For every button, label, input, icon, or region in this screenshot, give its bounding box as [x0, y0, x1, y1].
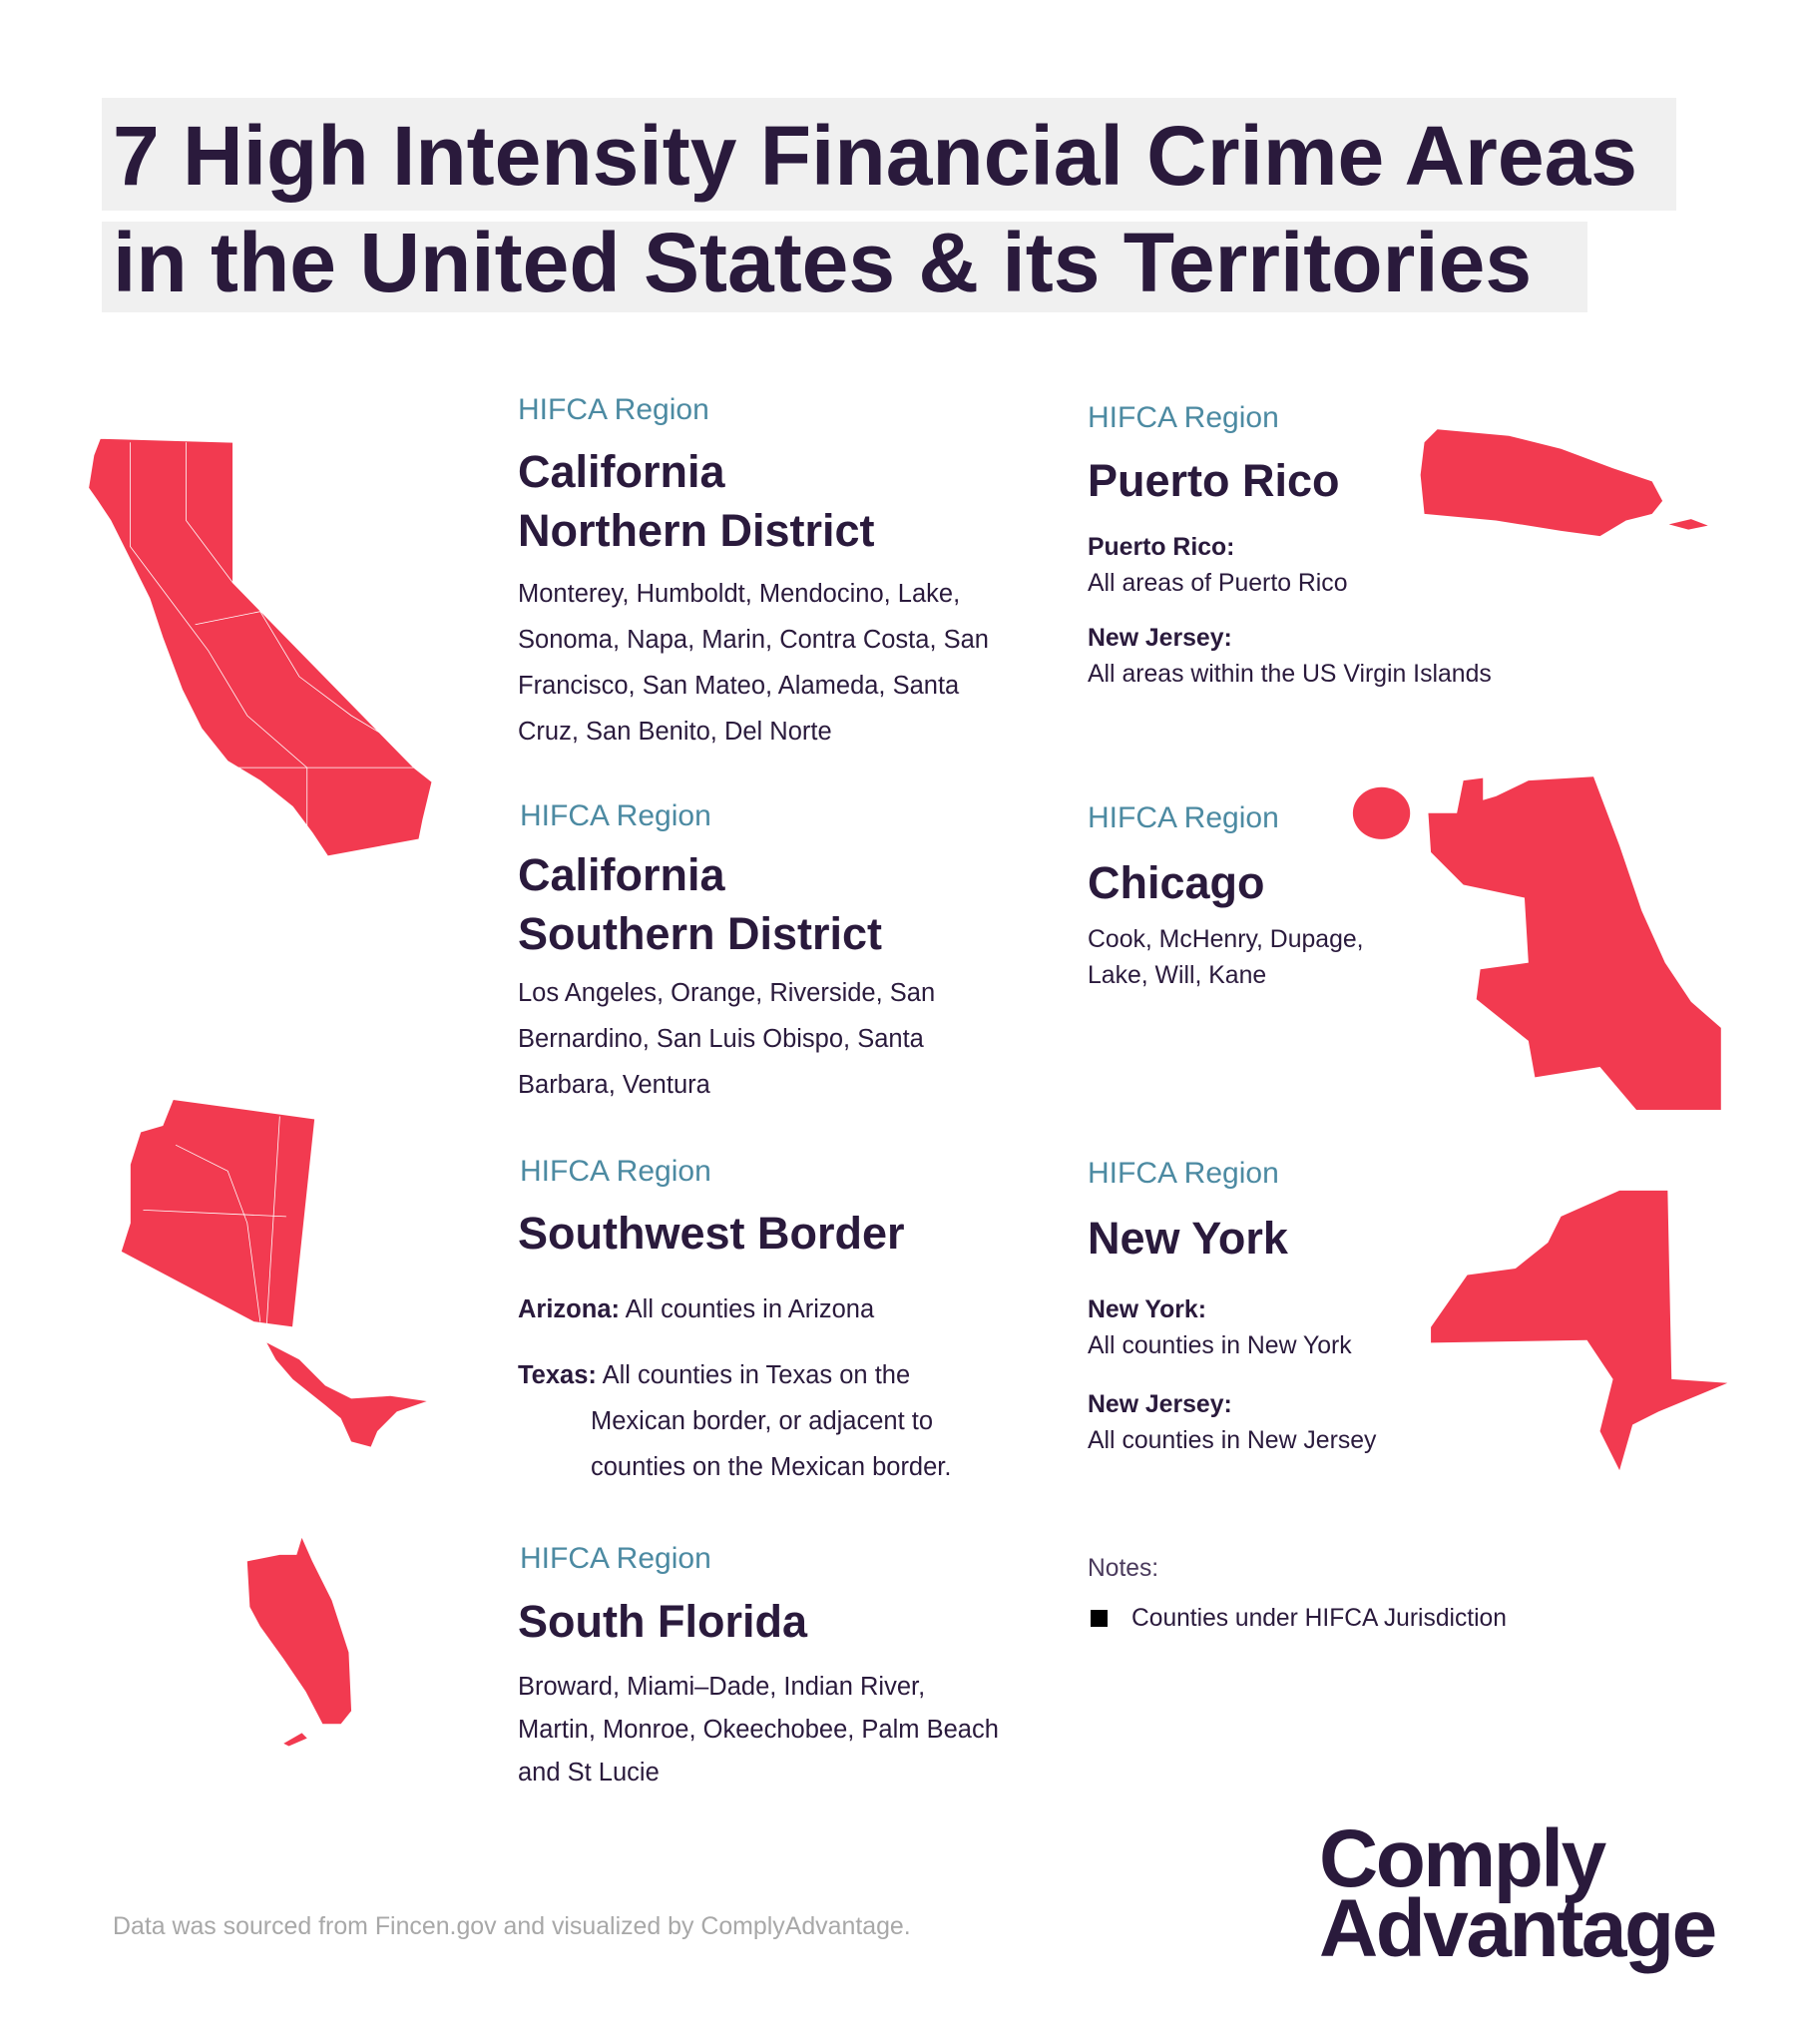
panel: california northern: Northern District: [518, 505, 875, 556]
legend swatch: [1091, 1610, 1108, 1627]
panel: new york: [1088, 1157, 1377, 1454]
panel: south florida: Broward, Miami–Dade, Indian River,: [518, 1673, 925, 1701]
panel: southwest border: Arizona: All counties in Arizona: [518, 1295, 874, 1323]
panel: puerto rico: All areas of Puerto Rico: [1088, 570, 1347, 597]
logo: Comply: [1319, 1813, 1604, 1904]
panel: puerto rico: New Jersey:: [1088, 625, 1232, 652]
panel: chicago: [1088, 801, 1364, 989]
legend notes: Notes:: [1088, 1555, 1158, 1582]
map: florida: [247, 1538, 351, 1746]
panel: puerto rico: All areas within the US Virgin Islands: [1088, 661, 1492, 688]
panel: chicago: Lake, Will, Kane: [1088, 962, 1266, 989]
panel: southwest border: Southwest Border: [518, 1208, 905, 1259]
title: 7 High Intensity Financial Crime Areas: [113, 109, 1637, 203]
panel: chicago: HIFCA Region: [1088, 801, 1279, 834]
panel: california northern: Francisco, San Mateo, Alameda, Santa: [518, 672, 959, 700]
panel: california northern: HIFCA Region: [518, 393, 709, 426]
panel: puerto rico: HIFCA Region: [1088, 401, 1279, 434]
panel: new york: New York: [1088, 1213, 1288, 1264]
panel: california southern: HIFCA Region: [520, 799, 711, 832]
title: in the United States & its Territories: [113, 216, 1532, 309]
panel: southwest border: counties on the Mexican border.: [591, 1453, 951, 1481]
panel: south florida: Martin, Monroe, Okeechobee, Palm Beach: [518, 1716, 999, 1744]
panel: chicago: Cook, McHenry, Dupage,: [1088, 926, 1364, 953]
panel: california northern: [518, 393, 989, 746]
panel: south florida: South Florida: [518, 1596, 807, 1647]
panel: southwest border: HIFCA Region: [520, 1155, 711, 1188]
legend notes: [1088, 1555, 1507, 1632]
panel: chicago: Chicago: [1088, 857, 1265, 908]
logo: Advantage: [1319, 1883, 1715, 1974]
panel: california southern: California: [518, 849, 725, 900]
map: puerto rico: [1421, 429, 1708, 536]
panel: southwest border: [518, 1155, 951, 1481]
panel: california southern: Southern District: [518, 908, 882, 959]
panel: california northern: Cruz, San Benito, Del Norte: [518, 718, 832, 746]
panel: new york: New York:: [1088, 1296, 1206, 1323]
panel: south florida: [518, 1542, 999, 1787]
panel: new york: All counties in New Jersey: [1088, 1427, 1376, 1454]
panel: south florida: and St Lucie: [518, 1759, 660, 1787]
panel: new york: All counties in New York: [1088, 1332, 1352, 1359]
panel: southwest border: Texas: All counties in Texas on the: [518, 1361, 910, 1389]
panel: california northern: California: [518, 446, 725, 497]
map: new york: [1431, 1191, 1727, 1470]
map: california: [89, 438, 432, 856]
panel: california southern: Bernardino, San Luis Obispo, Santa: [518, 1025, 924, 1053]
panel: california northern: Sonoma, Napa, Marin, Contra Costa, San: [518, 626, 989, 654]
map: arizona: [121, 1100, 315, 1327]
panel: puerto rico: [1088, 401, 1492, 688]
panel: puerto rico: Puerto Rico: [1088, 455, 1340, 506]
footer source: Data was sourced from Fincen.gov and visualized by ComplyAdvantage.: [113, 1912, 911, 1940]
panel: south florida: HIFCA Region: [520, 1542, 711, 1575]
panel: california northern: Monterey, Humboldt, Mendocino, Lake,: [518, 580, 960, 608]
panel: new york: HIFCA Region: [1088, 1157, 1279, 1190]
map: texas border: [266, 1342, 427, 1447]
panel: california southern: Los Angeles, Orange, Riverside, San: [518, 979, 935, 1007]
panel: new york: New Jersey:: [1088, 1391, 1232, 1418]
legend notes: Counties under HIFCA Jurisdiction: [1131, 1605, 1507, 1632]
panel: california southern: Barbara, Ventura: [518, 1071, 710, 1099]
panel: california southern: [518, 799, 935, 1099]
title: [102, 98, 1676, 312]
panel: southwest border: Mexican border, or adjacent to: [591, 1407, 933, 1435]
panel: puerto rico: Puerto Rico:: [1088, 534, 1234, 561]
map: chicago: [1353, 776, 1721, 1110]
logo: [1319, 1813, 1715, 1974]
